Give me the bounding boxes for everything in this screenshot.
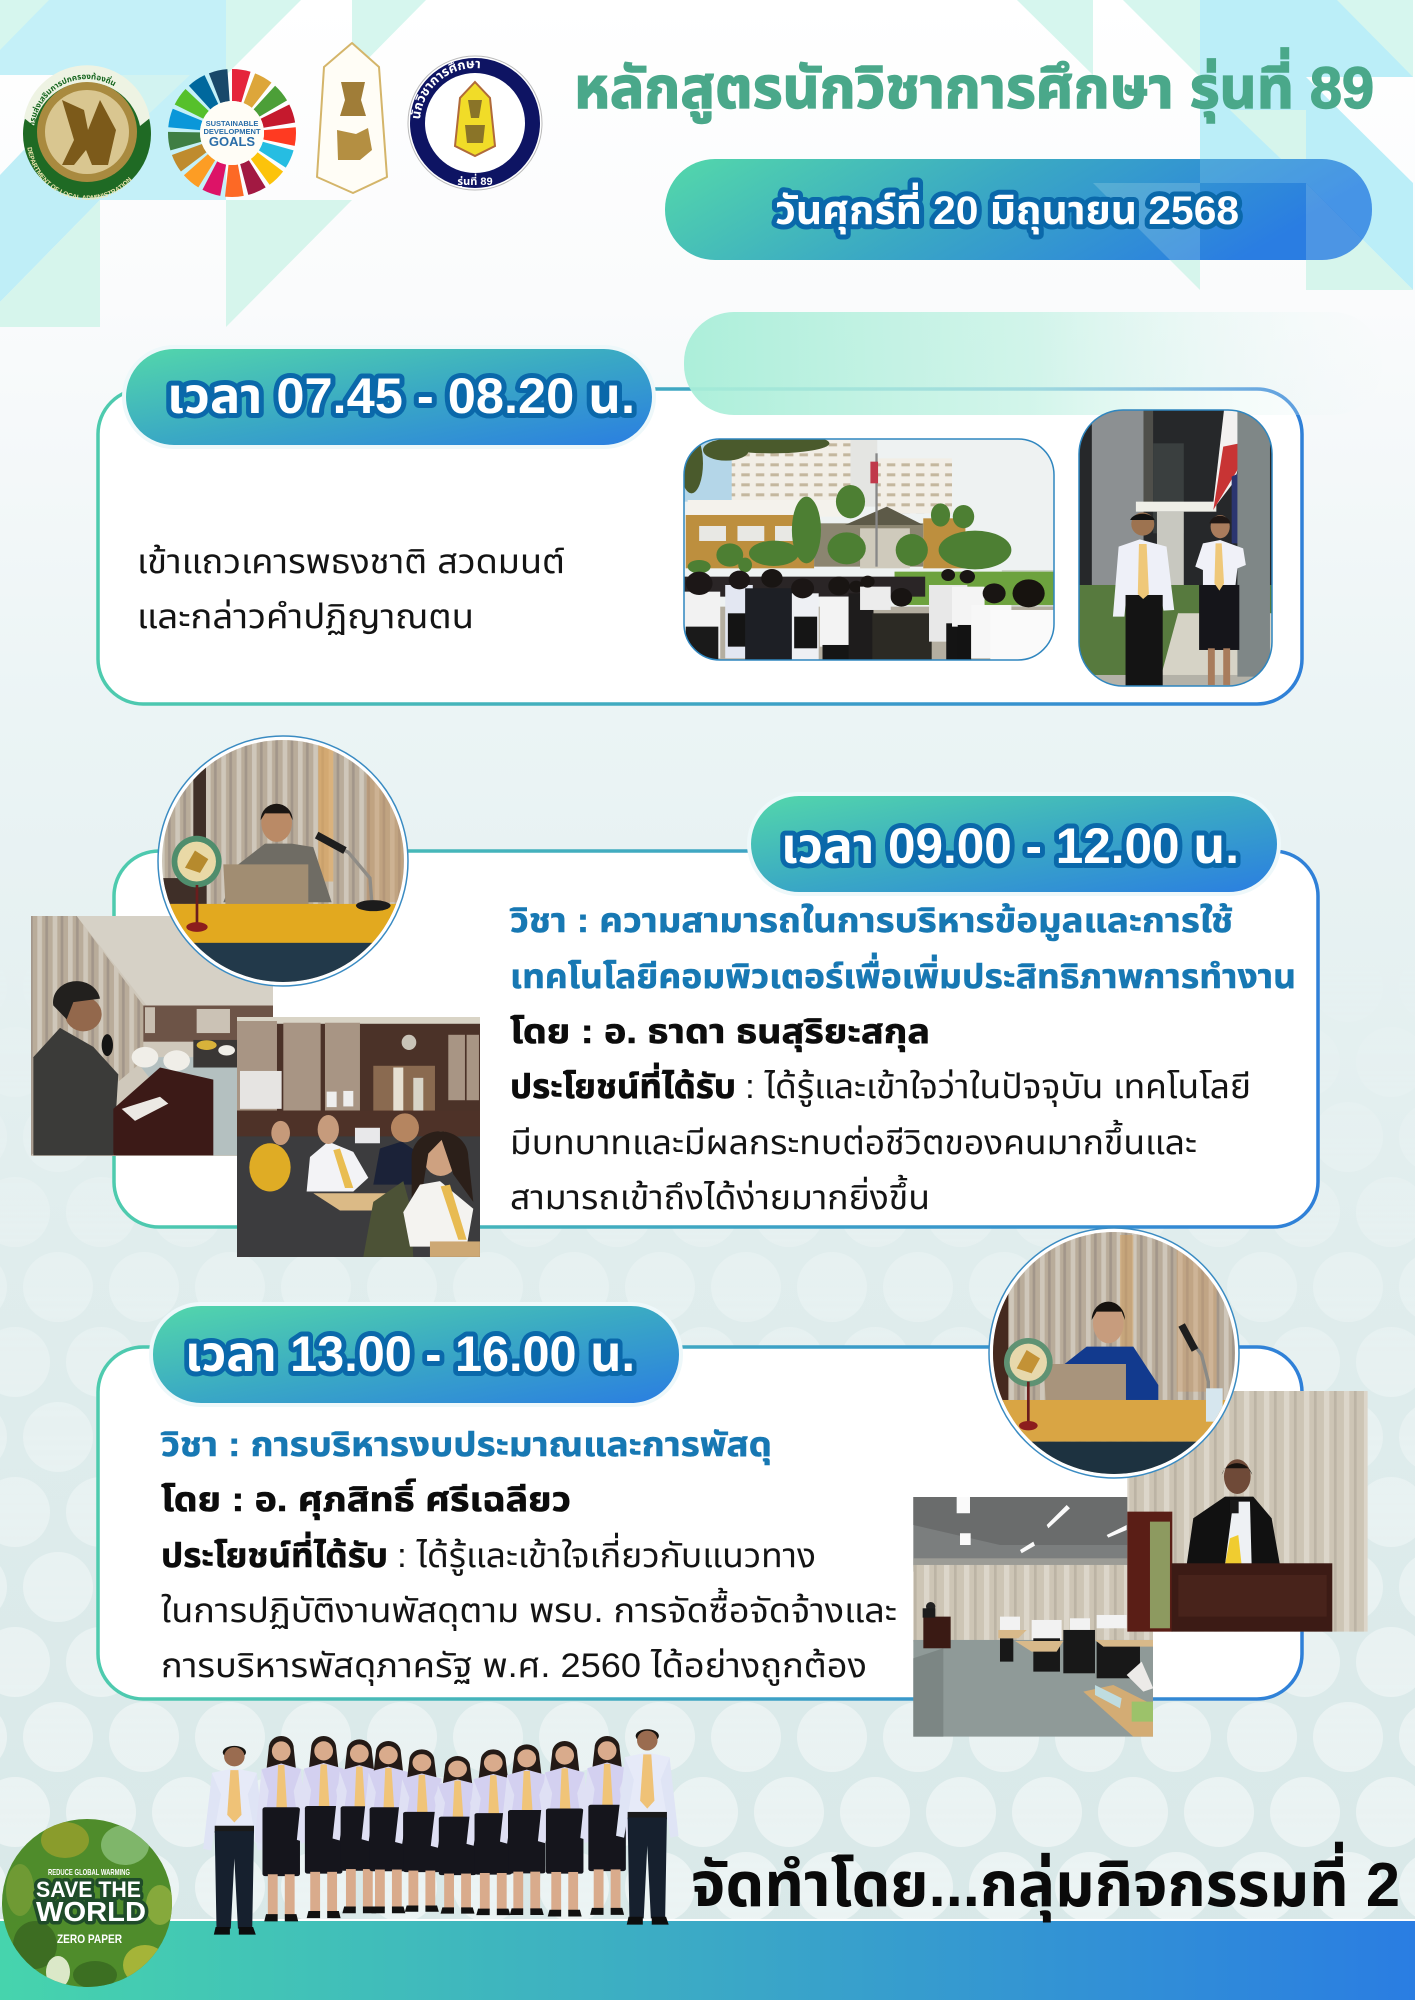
credit text: จัดทำโดย...กลุ่มกิจกรรมที่ 2 <box>691 1841 1400 1922</box>
bottom gradient bar <box>0 1919 1415 2000</box>
logo: sustainable development goals label: DEVELOPMENT <box>203 127 261 136</box>
photo: speaker at podium <box>31 916 274 1157</box>
badge: save the world zero paper: SAVE THE <box>36 1877 141 1902</box>
photo: lecturer in circle frame <box>988 1227 1242 1482</box>
badge: save the world zero paper: REDUCE GLOBAL WARMING <box>48 1867 130 1877</box>
leaf decoration <box>6 1822 174 1989</box>
logo: academic course seal <box>408 56 542 190</box>
badge: save the world zero paper <box>2 1819 174 1989</box>
benefits: ในการปฏิบัติงานพัสดุตาม พรบ. การจัดซื้อจัดจ้างและ <box>161 1587 897 1631</box>
date banner: วันศุกร์ที่ 20 มิถุนายน 2568 <box>775 182 1239 235</box>
photo: assembly in front of hotel <box>680 433 1059 663</box>
panel: 07.45 flag ceremony <box>98 312 1382 704</box>
panel: 09.00 morning lecture <box>31 733 1318 1258</box>
benefits: : ได้รู้และเข้าใจว่าในปัจจุบัน เทคโนโลยี <box>745 1068 1251 1107</box>
card frame <box>98 1347 1302 1699</box>
geometric triangles top left <box>0 0 426 327</box>
benefits: มีบทบาทและมีผลกระทบต่อชีวิตของคนมากขึ้นและ <box>510 1119 1197 1162</box>
logo: academic course seal: นักวิชาการศึกษา <box>410 60 480 118</box>
logo: sustainable development goals label <box>200 101 264 165</box>
photo: speaker behind wooden podium <box>1127 1391 1368 1632</box>
group photo of activity team <box>203 1729 679 1935</box>
logo: sustainable development goals label: GOALS <box>209 134 255 149</box>
time pill: เวลา 13.00 - 16.00 น. <box>185 1326 635 1382</box>
subject: เทคโนโลยีคอมพิวเตอร์เพื่อเพิ่มประสิทธิภาพการทำงาน <box>510 952 1296 996</box>
lecture text <box>160 1426 897 1686</box>
logo: department of local administration: DEPARTMENT OF LOCAL ADMINISTRATION <box>28 147 132 200</box>
activity text: เข้าแถวเคารพธงชาติ สวดมนต์ <box>137 543 565 581</box>
benefits: ประโยชน์ที่ได้รับ <box>510 1062 736 1106</box>
logo: sustainable development goals wheel <box>184 85 280 181</box>
polka dot background pattern <box>0 1354 1415 1919</box>
time pill: เวลา 09.00 - 12.00 น. <box>781 818 1239 874</box>
logo row <box>23 42 542 200</box>
time pill: เวลา 07.45 - 08.20 น. <box>167 368 635 424</box>
lecturer: โดย : อ. ธาดา ธนสุริยะสกุล <box>510 1013 930 1052</box>
lecturer: โดย : อ. ศุภสิทธิ์ ศรีเฉลียว <box>161 1478 571 1520</box>
time pill <box>749 794 1279 894</box>
title: หลักสูตรนักวิชาการศึกษา รุ่นที่ 89 <box>574 47 1374 124</box>
badge: save the world zero paper: WORLD <box>36 1896 146 1927</box>
subject: วิชา : ความสามารถในการบริหารข้อมูลและการใช้ <box>509 902 1233 941</box>
subject <box>509 902 1296 996</box>
logo: department of local administration: กรมส่งเสริมการปกครองท้องถิ่น <box>30 72 116 126</box>
time pill <box>124 347 654 447</box>
card frame <box>114 851 1318 1227</box>
date banner <box>665 159 1372 260</box>
activity text <box>137 543 565 636</box>
badge: save the world zero paper: ZERO PAPER <box>57 1932 122 1946</box>
benefits: สามารถเข้าถึงได้ง่ายมากยิ่งขึ้น <box>510 1174 930 1217</box>
card frame <box>98 389 1302 704</box>
photo: two officers at flagpole <box>1078 407 1278 693</box>
logo: shield emblem <box>317 43 387 193</box>
logo: sustainable development goals label: SUSTAINABLE <box>206 119 258 128</box>
logo: academic course seal: รุ่นที่ 89 <box>457 173 493 188</box>
photo: participants in classroom <box>237 1017 480 1258</box>
subject: วิชา : การบริหารงบประมาณและการพัสดุ <box>160 1426 772 1465</box>
panel: 13.00 afternoon lecture <box>98 1227 1368 1737</box>
logo: department of local administration <box>23 65 151 200</box>
lecture text <box>509 902 1296 1217</box>
time pill <box>151 1304 681 1405</box>
benefits <box>510 1062 1251 1217</box>
benefits: : ได้รู้และเข้าใจเกี่ยวกับแนวทาง <box>397 1532 816 1576</box>
benefits: การบริหารพัสดุภาครัฐ พ.ศ. 2560 ได้อย่างถูกต้อง <box>161 1647 867 1686</box>
decorative mint pill <box>684 312 1382 415</box>
benefits: ประโยชน์ที่ได้รับ <box>161 1531 388 1575</box>
geometric triangles top right <box>1017 0 1413 290</box>
benefits <box>161 1531 897 1686</box>
activity text: และกล่าวคำปฏิญาณตน <box>137 598 474 636</box>
photo: wide classroom <box>913 1497 1153 1737</box>
photo: lecturer in circle frame <box>157 733 410 988</box>
